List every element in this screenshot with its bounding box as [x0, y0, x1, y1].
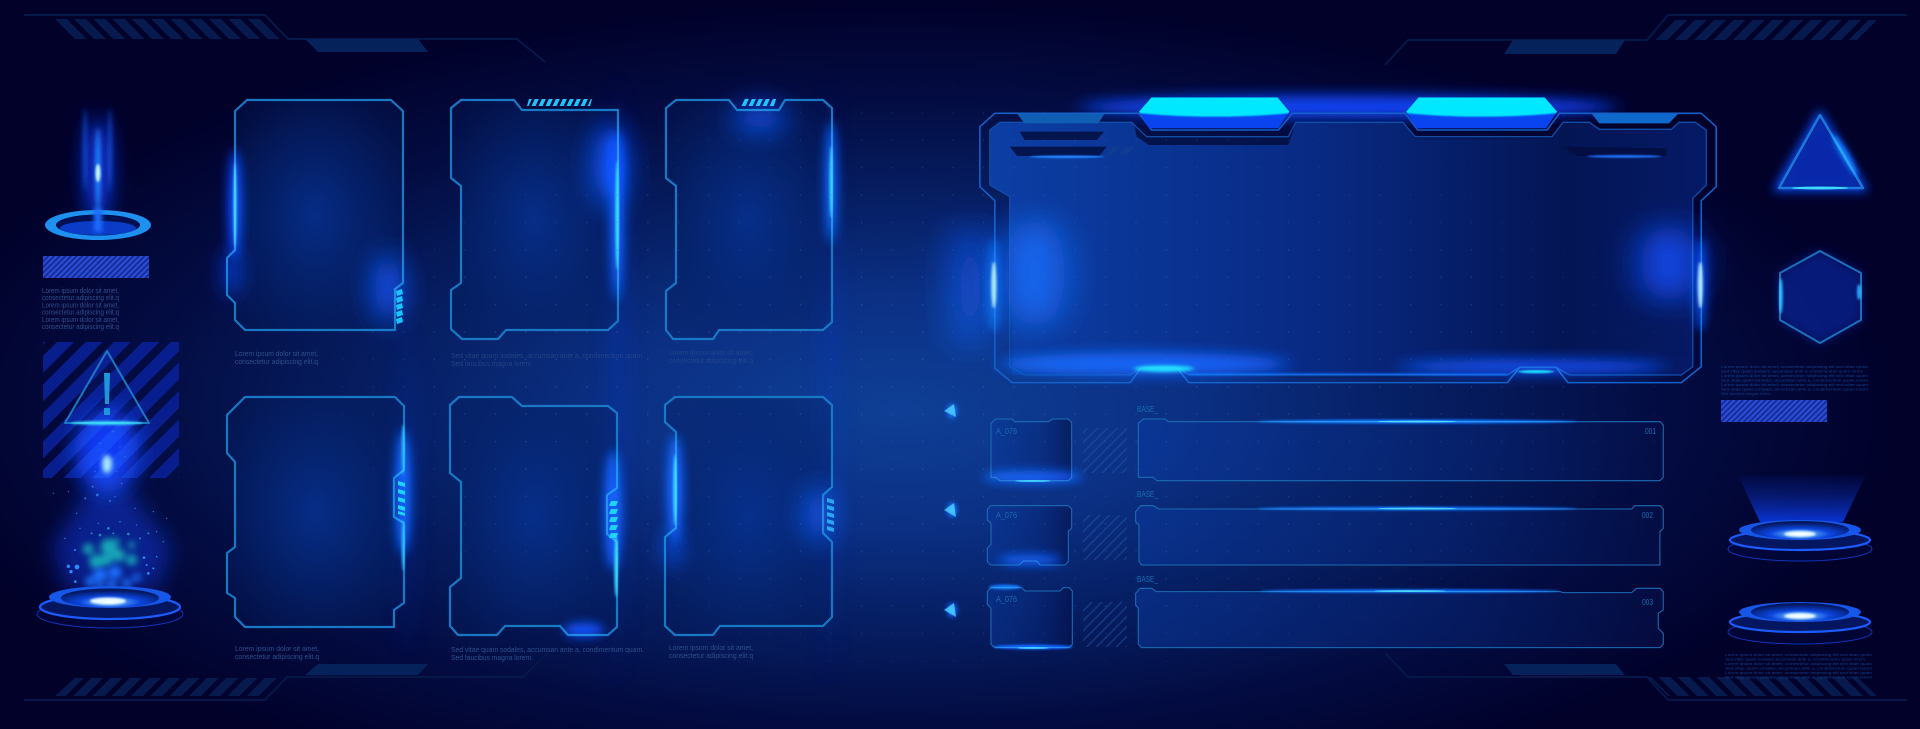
caption 4: Lorem ipsum dolor sit amet,: [235, 644, 319, 653]
hologram platform right top: [1728, 473, 1872, 561]
tab 2: [1406, 97, 1557, 128]
header decoration: top left: [24, 15, 545, 62]
icon: glowing hexagon: [1779, 251, 1861, 343]
caption 6: Lorem ipsum dolor sit amet,: [669, 643, 753, 652]
particle cloud: [53, 431, 167, 591]
teeth: frame 4: [398, 481, 405, 516]
caption 4: consectetur adipiscing elit.q: [235, 652, 319, 661]
footer decoration: bottom left: [24, 653, 548, 700]
small box B: [987, 506, 1072, 565]
text block bottom right: Lorem ipsum dolor sit amet, consectetur adipiscing elit sed vitae quam: [1725, 652, 1873, 657]
caption 5: Sed vitae quam sodales, accumsan ante a, condimentum quam.: [451, 645, 644, 654]
teeth: frame 1: [396, 289, 403, 324]
footer decoration: bottom right: [1385, 653, 1907, 700]
caption 2: Sed vitae quam sodales, accumsan ante a, condimentum quam.: [451, 351, 644, 360]
hatched bar left: [43, 256, 149, 278]
caption 3: [669, 348, 753, 365]
top corner patches: [1017, 114, 1104, 123]
dot grid: [312, 84, 1686, 662]
text block left: Lorem ipsum dolor sit amet,: [42, 300, 119, 310]
hologram platform right bottom: [1728, 602, 1872, 644]
caption 2: Sed faucibus magna lorem.: [451, 359, 533, 368]
glow lines: [983, 420, 1577, 483]
caption 6: [669, 643, 753, 660]
vertical light bands: [400, 70, 836, 690]
caption 1: consectetur adipiscing elit.q: [235, 357, 318, 366]
text block right: Sed faucibus magna lorem.: [1721, 391, 1771, 396]
frame 1: [225, 100, 403, 330]
platform base: [37, 586, 183, 628]
row labels: A_076: [996, 594, 1017, 604]
text block left: consectetur adipiscing elit.q: [42, 308, 119, 316]
caption 3: consectetur adipiscing elit.q: [669, 356, 753, 365]
frame 3: [666, 99, 837, 339]
caption 2: [451, 351, 644, 368]
text block bottom right: Sed vitae quam sodales, accumsan ante a, condimentum quam lorem: [1725, 656, 1866, 662]
text block left: consectetur adipiscing elit.q: [42, 293, 119, 302]
frame 4: [227, 397, 411, 627]
caption 6: consectetur adipiscing elit.q: [669, 651, 753, 660]
caption 1: Lorem ipsum dolor sit amet,: [235, 349, 318, 358]
icon: warning triangle: [65, 351, 149, 425]
panel: main large frame: [955, 73, 1716, 383]
row labels: [996, 404, 1656, 607]
header decoration: top right: [1385, 15, 1907, 65]
text block bottom right: Lorem ipsum dolor sit amet, consectetur adipiscing elit sed vitae quam: [1725, 661, 1873, 666]
row 2: small box and bar: [987, 506, 1663, 565]
row labels: BASE_: [1137, 404, 1158, 414]
row labels: BASE_: [1137, 489, 1158, 499]
teeth: frame 6: [827, 498, 834, 532]
row labels: A_076: [996, 426, 1017, 436]
panel glows: [989, 155, 1705, 375]
glow lines: [989, 584, 1560, 650]
text block left: Lorem ipsum dolor sit amet,: [42, 315, 119, 324]
text block bottom right: Lorem ipsum dolor sit amet, consectetur adipiscing elit sed vitae quam: [1725, 670, 1873, 675]
glow: frame 4: [395, 424, 411, 571]
caption 3: Lorem ipsum dolor sit amet,: [669, 348, 753, 357]
row labels: 002: [1642, 510, 1653, 520]
teeth: frame 5: [609, 501, 618, 538]
arrow markers: [944, 404, 957, 617]
tab 1: [1139, 97, 1290, 128]
text block bottom right: [1725, 652, 1873, 680]
frame 2: [451, 99, 626, 339]
frame 5: [450, 397, 622, 637]
row labels: BASE_: [1137, 574, 1158, 584]
caption 4: [235, 644, 319, 661]
text block right: Sed vitae quam sodales, accumsan ante a, condimentum quam lorem: [1721, 378, 1869, 382]
frame 6: [665, 397, 834, 635]
long bar: [1136, 588, 1663, 648]
text block right: Lorem ipsum dolor sit amet, consectetur adipiscing elit sed vitae quam: [1721, 364, 1869, 369]
text block left: Lorem ipsum dolor sit amet,: [42, 286, 119, 295]
hologram ring with light beam: [45, 108, 151, 240]
hologram platform with particles: [37, 431, 183, 628]
long bar: [1138, 419, 1663, 481]
text block left: consectetur adipiscing elit.q: [42, 322, 119, 331]
main panel fill: [990, 122, 1706, 375]
glow: frame 3: [734, 106, 837, 242]
hatch tab: frame 2: [527, 99, 592, 106]
row 1: small box and bar: [983, 419, 1663, 483]
hatched bar right: [1721, 400, 1827, 422]
dark top band: [1010, 123, 1666, 156]
row labels: A_076: [996, 510, 1017, 520]
long bar: [1136, 506, 1663, 565]
text block bottom right: Sed vitae quam sodales, accumsan ante a, condimentum quam lorem: [1725, 674, 1873, 680]
glow: frame 5: [564, 450, 622, 637]
glow: frame 2: [594, 123, 626, 300]
caption 5: [451, 645, 644, 662]
caption 1: [235, 349, 318, 366]
row 3: small box and bar: [987, 584, 1663, 650]
frame inner outline: [990, 122, 1706, 375]
text block left: [42, 286, 119, 331]
text block right: Lorem ipsum dolor sit amet, consectetur adipiscing elit sed vitae quam: [1721, 382, 1869, 387]
text block bottom right: Sed vitae quam sodales, accumsan ante a, condimentum quam lorem: [1725, 666, 1873, 670]
text block right: [1721, 364, 1869, 396]
warning panel with stripes: [43, 342, 179, 492]
hatch square: [1083, 602, 1127, 647]
small box A: [991, 419, 1072, 481]
text block right: Lorem ipsum dolor sit amet, consectetur adipiscing elit sed vitae quam: [1721, 373, 1869, 378]
frame outer outline: [980, 113, 1716, 383]
text block right: Sed vitae quam sodales, accumsan ante a, condimentum quam lorem: [1721, 368, 1864, 374]
hatch square: [1083, 515, 1127, 560]
icon: glowing triangle: [1778, 115, 1863, 190]
small box C: [987, 588, 1072, 648]
hatch tab: frame 3: [740, 99, 776, 106]
row labels: 003: [1642, 597, 1653, 607]
text block right: Sed vitae quam sodales, accumsan ante a, condimentum quam lorem: [1721, 386, 1869, 392]
glow lines: [998, 507, 1577, 565]
caption 5: Sed faucibus magna lorem.: [451, 653, 533, 662]
glow: frame 6: [666, 435, 830, 568]
row labels: 001: [1645, 426, 1656, 436]
glow: frame 1: [225, 150, 402, 322]
hatch square: [1083, 428, 1127, 473]
